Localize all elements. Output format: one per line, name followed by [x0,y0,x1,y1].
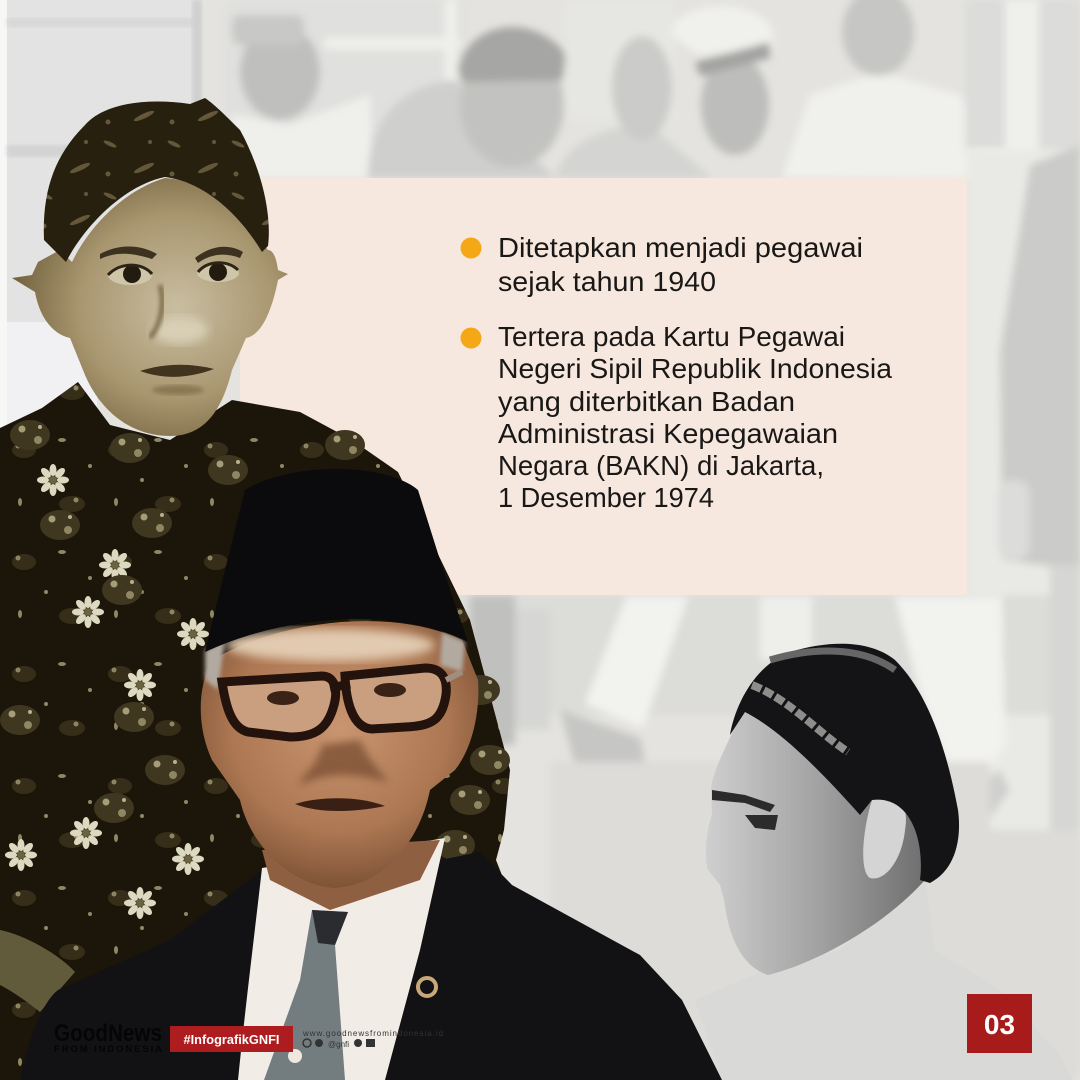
face profile [706,680,930,975]
lapel badge [418,978,436,996]
hashtag label: #InfografikGNFI [184,1032,280,1047]
footer branding [54,1020,443,1055]
bullet two [460,328,482,348]
ear [863,794,906,878]
batik band [752,685,848,752]
hashtag label [170,1026,293,1052]
neck and face [12,178,288,436]
tie pin [288,1049,302,1063]
eye and brow [712,790,778,830]
bullet one [460,238,482,258]
fact two text: yang diterbitkan Badan [498,386,795,417]
glasses [222,668,462,737]
white jacket [695,878,1073,1080]
website and social handles: www.goodnewsfromindonesia.id [302,1029,443,1038]
GoodNews logo [54,1020,162,1055]
forearm lower left [0,930,75,1012]
fact two text [498,321,893,513]
fact one text: Ditetapkan menjadi pegawai [498,232,863,263]
flower motifs [0,420,510,919]
dark suit [20,852,722,1080]
page number badge [967,994,1032,1053]
GoodNews logo: GoodNews [54,1020,162,1047]
grey hair [205,632,465,690]
fact two text: Negara (BAKN) di Jakarta, [498,450,824,481]
website and social handles: @gnfi [328,1040,349,1049]
peci cap [205,469,468,652]
fact two text: 1 Desember 1974 [498,482,714,513]
GoodNews logo: FROM INDONESIA [54,1044,162,1055]
neck [262,840,440,910]
blangkon headwear [730,644,959,883]
fact one text [498,232,863,297]
page number badge: 03 [984,1009,1015,1040]
fact one text: sejak tahun 1940 [498,266,716,297]
figure: man with blangkon and floral batik (sepia) [0,98,510,1080]
nose and mouth [300,740,388,785]
facial features [100,246,243,395]
white shirt [238,838,445,1080]
figure: man with blangkon in profile (grayscale, right) [695,644,1073,1080]
face and ears [201,621,478,888]
fact two text: Administrasi Kepegawaian [498,418,838,449]
fact two text: Tertera pada Kartu Pegawai [498,321,845,352]
panel: text background [240,178,967,595]
blangkon headwear [44,98,269,262]
floral batik shirt [0,382,510,1080]
striped tie [264,910,348,1080]
figure: man with round cap and glasses (colour, centre) [20,469,722,1080]
forehead highlight [225,629,435,661]
website and social handles [302,1029,443,1049]
list: facts [460,232,893,513]
fact two text: Negeri Sipil Republik Indonesia [498,353,893,384]
